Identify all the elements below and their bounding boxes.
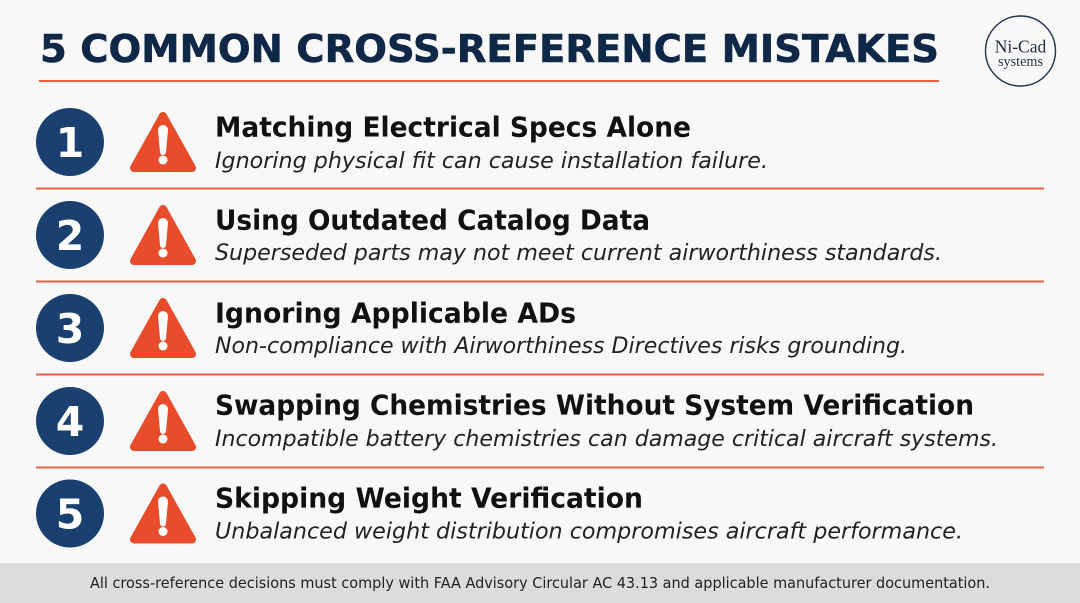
item 1	[36, 108, 768, 176]
logo: Ni-Cad systems: Ni-Cad	[995, 36, 1047, 56]
item 5: Unbalanced weight distribution compromises aircraft performance.	[215, 520, 963, 544]
logo: Ni-Cad systems	[986, 16, 1056, 86]
footer	[0, 563, 1080, 603]
item 4: 4	[56, 398, 84, 446]
item 2	[36, 201, 942, 269]
item 5	[36, 480, 963, 548]
item 3: Non-compliance with Airworthiness Directives risks grounding.	[215, 334, 907, 359]
item 5: 5	[56, 490, 84, 538]
item 4: Incompatible battery chemistries can damage critical aircraft systems.	[215, 427, 998, 452]
item 1: Matching Electrical Specs Alone	[215, 110, 691, 144]
item 1: 1	[56, 119, 84, 167]
item 4: Swapping Chemistries Without System Verification	[215, 388, 974, 422]
title: 5 COMMON CROSS-REFERENCE MISTAKES	[40, 27, 939, 72]
item 2: 2	[56, 212, 84, 260]
item 5: Skipping Weight Verification	[215, 482, 643, 514]
item 2: Superseded parts may not meet current airworthiness standards.	[215, 241, 942, 266]
logo: Ni-Cad systems: systems	[998, 54, 1043, 70]
item 1: Ignoring physical fit can cause installation failure.	[215, 149, 768, 174]
footer: All cross-reference decisions must comply with FAA Advisory Circular AC 43.13 and applicable manufacturer documentation.	[90, 574, 990, 592]
item 3	[36, 294, 907, 362]
item 3: 3	[56, 305, 84, 353]
item 2: Using Outdated Catalog Data	[215, 204, 650, 236]
item 4	[36, 387, 998, 455]
item 3: Ignoring Applicable ADs	[215, 296, 576, 330]
